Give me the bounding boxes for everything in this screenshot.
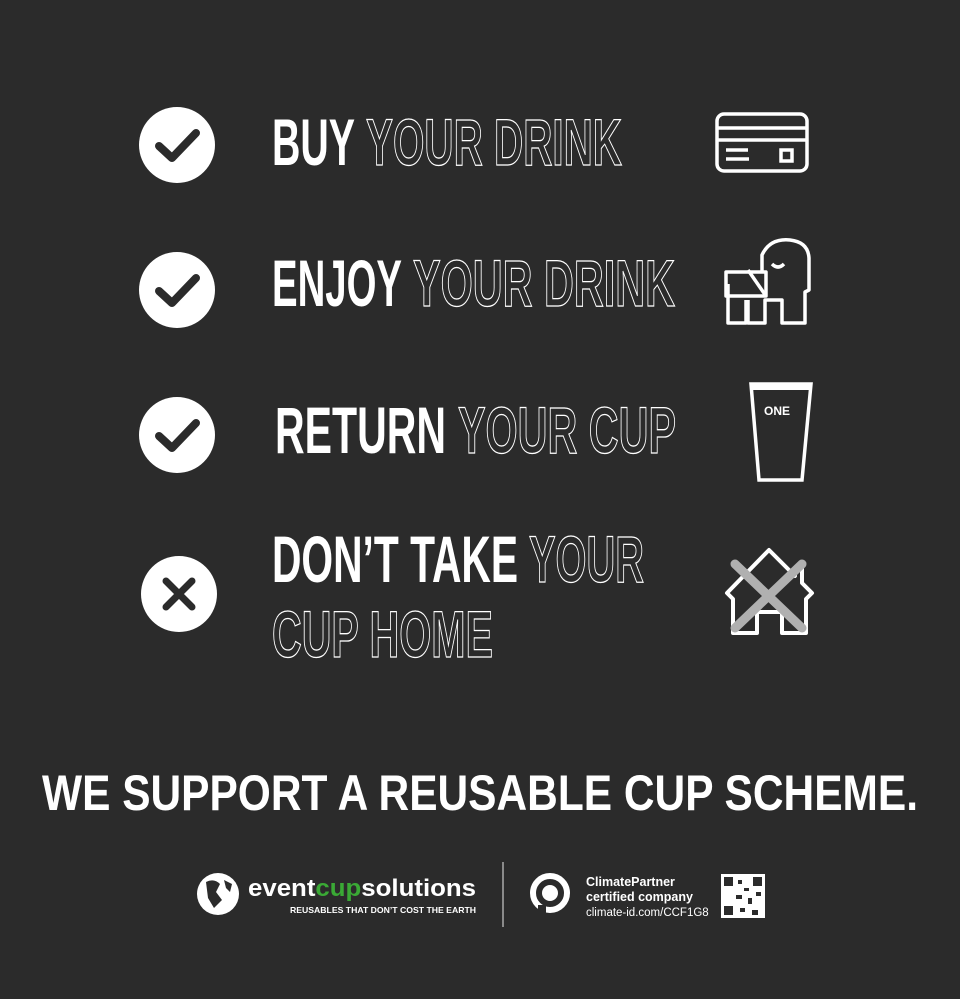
icon: ONE cup: ONE xyxy=(764,404,790,418)
step 4: don't take your cup home xyxy=(141,522,812,671)
logo: climatepartner xyxy=(533,875,709,919)
heading: don't take your cup home xyxy=(272,522,644,671)
icon: check circle 1 xyxy=(139,107,215,183)
icon: check circle 3 xyxy=(139,397,215,473)
heading: don't take your cup home: DON’T TAKE xyxy=(272,522,518,596)
heading: return your cup: RETURN xyxy=(275,393,446,467)
footer logos xyxy=(197,862,765,927)
qr code xyxy=(721,874,765,918)
icon: ONE cup xyxy=(751,384,811,480)
heading: buy your drink: BUY xyxy=(272,105,355,179)
heading: don't take your cup home: YOUR xyxy=(529,522,644,596)
heading: buy your drink: YOUR DRINK xyxy=(366,105,622,179)
logo: climatepartner: ClimatePartner xyxy=(586,875,675,889)
heading: buy your drink xyxy=(272,105,622,179)
heading: don't take your cup home: CUP HOME xyxy=(272,597,493,671)
icon: person drinking xyxy=(726,240,809,323)
step 1: buy your drink xyxy=(139,105,807,183)
heading: return your cup: YOUR CUP xyxy=(458,393,676,467)
step 2: enjoy your drink xyxy=(139,240,809,328)
logo: climatepartner: climate-id.com/CCF1G8 xyxy=(586,907,709,919)
icon: check circle 2 xyxy=(139,252,215,328)
heading: enjoy your drink: ENJOY xyxy=(272,246,402,320)
icon: cross circle xyxy=(141,556,217,632)
heading: enjoy your drink: YOUR DRINK xyxy=(413,246,675,320)
icon: crossed house xyxy=(727,550,812,633)
logo: climatepartner: certified company xyxy=(586,890,693,904)
logo: eventcupsolutions: REUSABLES THAT DON’T COST THE EARTH xyxy=(290,905,476,915)
icon: credit card xyxy=(717,114,807,171)
heading: return your cup xyxy=(275,393,676,467)
logo: eventcupsolutions: eventcupsolutions xyxy=(248,875,476,902)
heading: enjoy your drink xyxy=(272,246,675,320)
step 3: return your cup xyxy=(139,384,811,480)
logo: eventcupsolutions xyxy=(197,873,476,915)
